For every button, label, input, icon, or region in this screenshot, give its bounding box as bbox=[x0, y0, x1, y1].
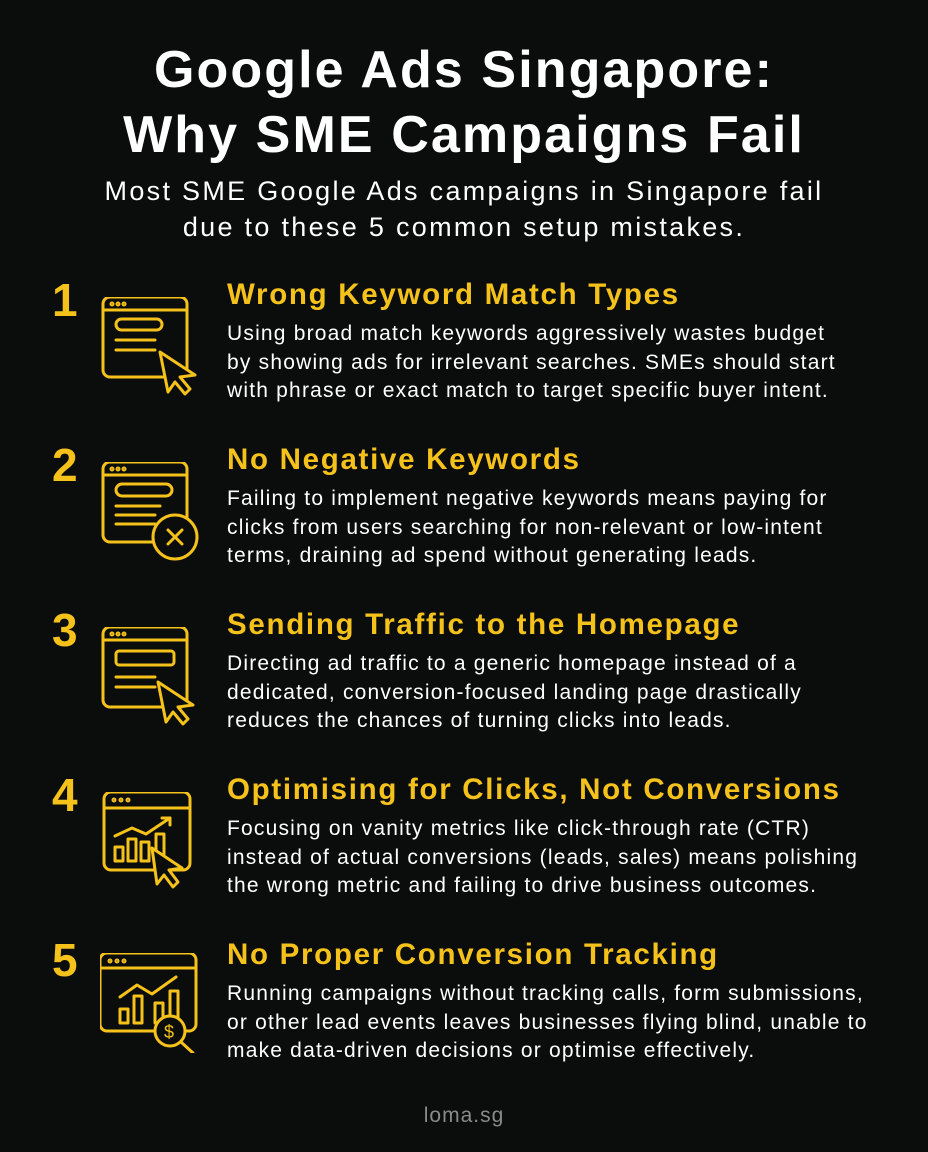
title: Why SME Campaigns Fail bbox=[123, 106, 805, 164]
body 5: or other lead events leaves businesses flying blind, unable to bbox=[227, 1010, 868, 1034]
body 1: Using broad match keywords aggressively wastes budget bbox=[227, 322, 825, 345]
body 4 bbox=[227, 817, 858, 897]
body 5 bbox=[227, 982, 868, 1062]
icon: browser with cursor bbox=[102, 297, 197, 396]
footer: loma.sg bbox=[424, 1104, 504, 1127]
heading 5: No Proper Conversion Tracking bbox=[227, 938, 719, 971]
body 3 bbox=[227, 652, 802, 732]
title: Google Ads Singapore: bbox=[154, 41, 774, 99]
section 4 bbox=[52, 769, 858, 897]
body 2: terms, draining ad spend without generating leads. bbox=[227, 544, 757, 567]
section 1 bbox=[52, 274, 836, 402]
body 3: Directing ad traffic to a generic homepage instead of a bbox=[227, 652, 797, 675]
subtitle bbox=[105, 176, 823, 242]
heading 3: Sending Traffic to the Homepage bbox=[227, 608, 740, 641]
icon: chart with cursor bbox=[102, 792, 192, 889]
body 2: Failing to implement negative keywords means paying for bbox=[227, 487, 828, 510]
icon: chart with magnifier dollar: $ bbox=[164, 1022, 174, 1042]
heading 1: Wrong Keyword Match Types bbox=[227, 278, 680, 311]
subtitle: due to these 5 common setup mistakes. bbox=[183, 212, 745, 242]
body 5: Running campaigns without tracking calls, form submissions, bbox=[227, 982, 864, 1005]
body 4: Focusing on vanity metrics like click-through rate (CTR) bbox=[227, 817, 810, 840]
icon: landing page with cursor bbox=[102, 627, 195, 726]
body 4: instead of actual conversions (leads, sales) means polishing bbox=[227, 846, 858, 868]
body 1: by showing ads for irrelevant searches. SMEs should start bbox=[227, 350, 836, 374]
body 4: the wrong metric and failing to drive business outcomes. bbox=[227, 874, 817, 897]
body 3: dedicated, conversion-focused landing page drastically bbox=[227, 680, 802, 704]
body 5: make data-driven decisions or optimise effectively. bbox=[227, 1039, 755, 1062]
icon: chart with magnifier dollar bbox=[100, 953, 198, 1053]
title bbox=[123, 41, 805, 164]
number 3: 3 bbox=[52, 604, 78, 656]
heading 4: Optimising for Clicks, Not Conversions bbox=[227, 773, 841, 806]
number 5: 5 bbox=[52, 934, 78, 986]
number 4: 4 bbox=[52, 769, 78, 821]
number 1: 1 bbox=[52, 274, 78, 326]
subtitle: Most SME Google Ads campaigns in Singapore fail bbox=[105, 176, 823, 206]
number 2: 2 bbox=[52, 439, 78, 491]
body 3: reduces the chances of turning clicks into leads. bbox=[227, 709, 732, 732]
section 3 bbox=[52, 604, 802, 732]
section 2 bbox=[52, 439, 828, 567]
body 1 bbox=[227, 322, 836, 402]
body 1: with phrase or exact match to target specific buyer intent. bbox=[227, 379, 829, 402]
section 5 bbox=[52, 934, 868, 1062]
body 2 bbox=[227, 487, 828, 567]
body 2: clicks from users searching for non-relevant or low-intent bbox=[227, 516, 823, 538]
icon: browser with x bbox=[102, 462, 198, 560]
heading 2: No Negative Keywords bbox=[227, 443, 581, 476]
